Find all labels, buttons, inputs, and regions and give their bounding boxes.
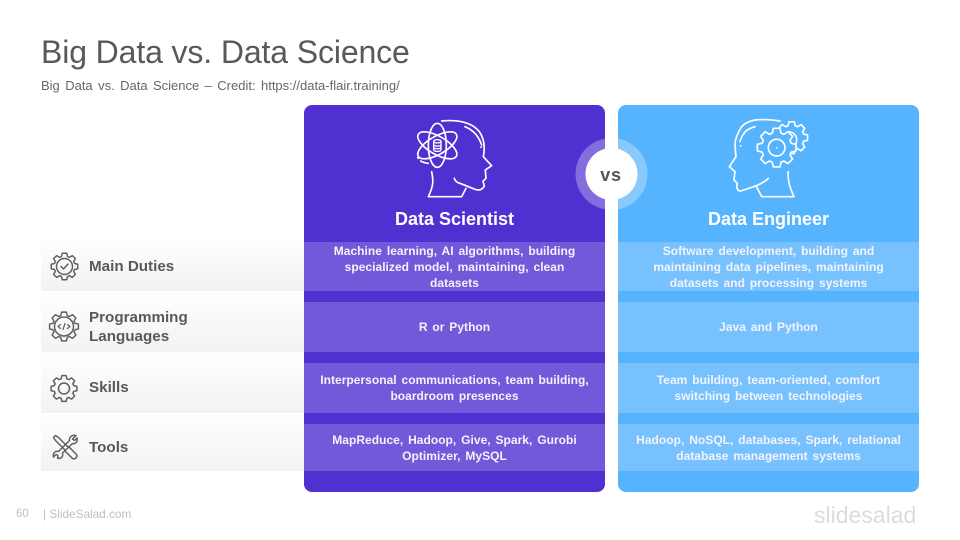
label: skills: Skills [89, 379, 129, 396]
icon: engineer head with gears [729, 120, 808, 197]
cell: scientist skills: Interpersonal communications, team building, [320, 373, 589, 387]
icon: programming languages gear [50, 312, 78, 341]
cell: scientist main duties: specialized model, maintaining, clean [345, 260, 564, 274]
cell: scientist tools: Optimizer, MySQL [402, 448, 507, 462]
label: tools: Tools [89, 439, 128, 456]
cell: engineer tools: database management systems [676, 448, 861, 462]
icon: tools [53, 435, 77, 459]
cell: engineer skills: Team building, team-oriented, comfort [657, 373, 880, 387]
label: programming languages: Languages [89, 328, 169, 345]
title: Big Data vs. Data Science [41, 34, 410, 70]
heading: data scientist: Data Scientist [395, 209, 514, 229]
cell: scientist skills: boardroom presences [390, 389, 519, 403]
cell: engineer main duties: maintaining data pipelines, maintaining [653, 260, 884, 274]
cell: scientist main duties: datasets [430, 276, 479, 290]
cell: scientist languages: R or Python [419, 320, 490, 334]
cell: scientist languages [304, 302, 605, 352]
cell: engineer main duties: Software development, building and [663, 244, 874, 258]
heading: data engineer: Data Engineer [708, 209, 829, 229]
icon: main duties gear [51, 253, 78, 280]
footer logo: slidesalad [814, 502, 916, 528]
vs badge [576, 138, 648, 210]
row band: main duties [41, 240, 304, 291]
footer site name: | SlideSalad.com [43, 507, 131, 521]
cell: engineer languages [618, 302, 919, 352]
label: programming languages: Programming [89, 309, 188, 326]
cell: scientist skills [304, 363, 605, 413]
subtitle: Big Data vs. Data Science – Credit: https://data-flair.training/ [41, 78, 400, 93]
row band: skills [41, 353, 304, 413]
label: main duties: Main Duties [89, 258, 174, 275]
cell: engineer tools: Hadoop, NoSQL, databases, Spark, relational [636, 432, 901, 446]
panel: data scientist [304, 105, 605, 492]
cell: scientist main duties: Machine learning, AI algorithms, building [334, 244, 575, 258]
cell: engineer tools [618, 424, 919, 471]
row band: tools [41, 414, 304, 471]
icon: scientist head with atom [414, 121, 492, 197]
cell: engineer main duties: datasets and processing systems [670, 276, 867, 290]
vs badge: vs [600, 165, 622, 185]
page number: 60 [16, 508, 29, 520]
row band: programming languages [41, 292, 304, 352]
cell: engineer main duties [618, 242, 919, 291]
cell: engineer skills [618, 363, 919, 413]
cell: scientist tools [304, 424, 605, 471]
label: programming languages [89, 309, 188, 345]
panel: data engineer [618, 105, 919, 492]
cell: engineer skills: switching between technologies [675, 389, 862, 403]
icon: skills gear [51, 376, 77, 401]
cell: scientist tools: MapReduce, Hadoop, Give, Spark, Gurobi [332, 432, 577, 446]
cell: engineer languages: Java and Python [719, 320, 818, 334]
cell: scientist main duties [304, 242, 605, 291]
